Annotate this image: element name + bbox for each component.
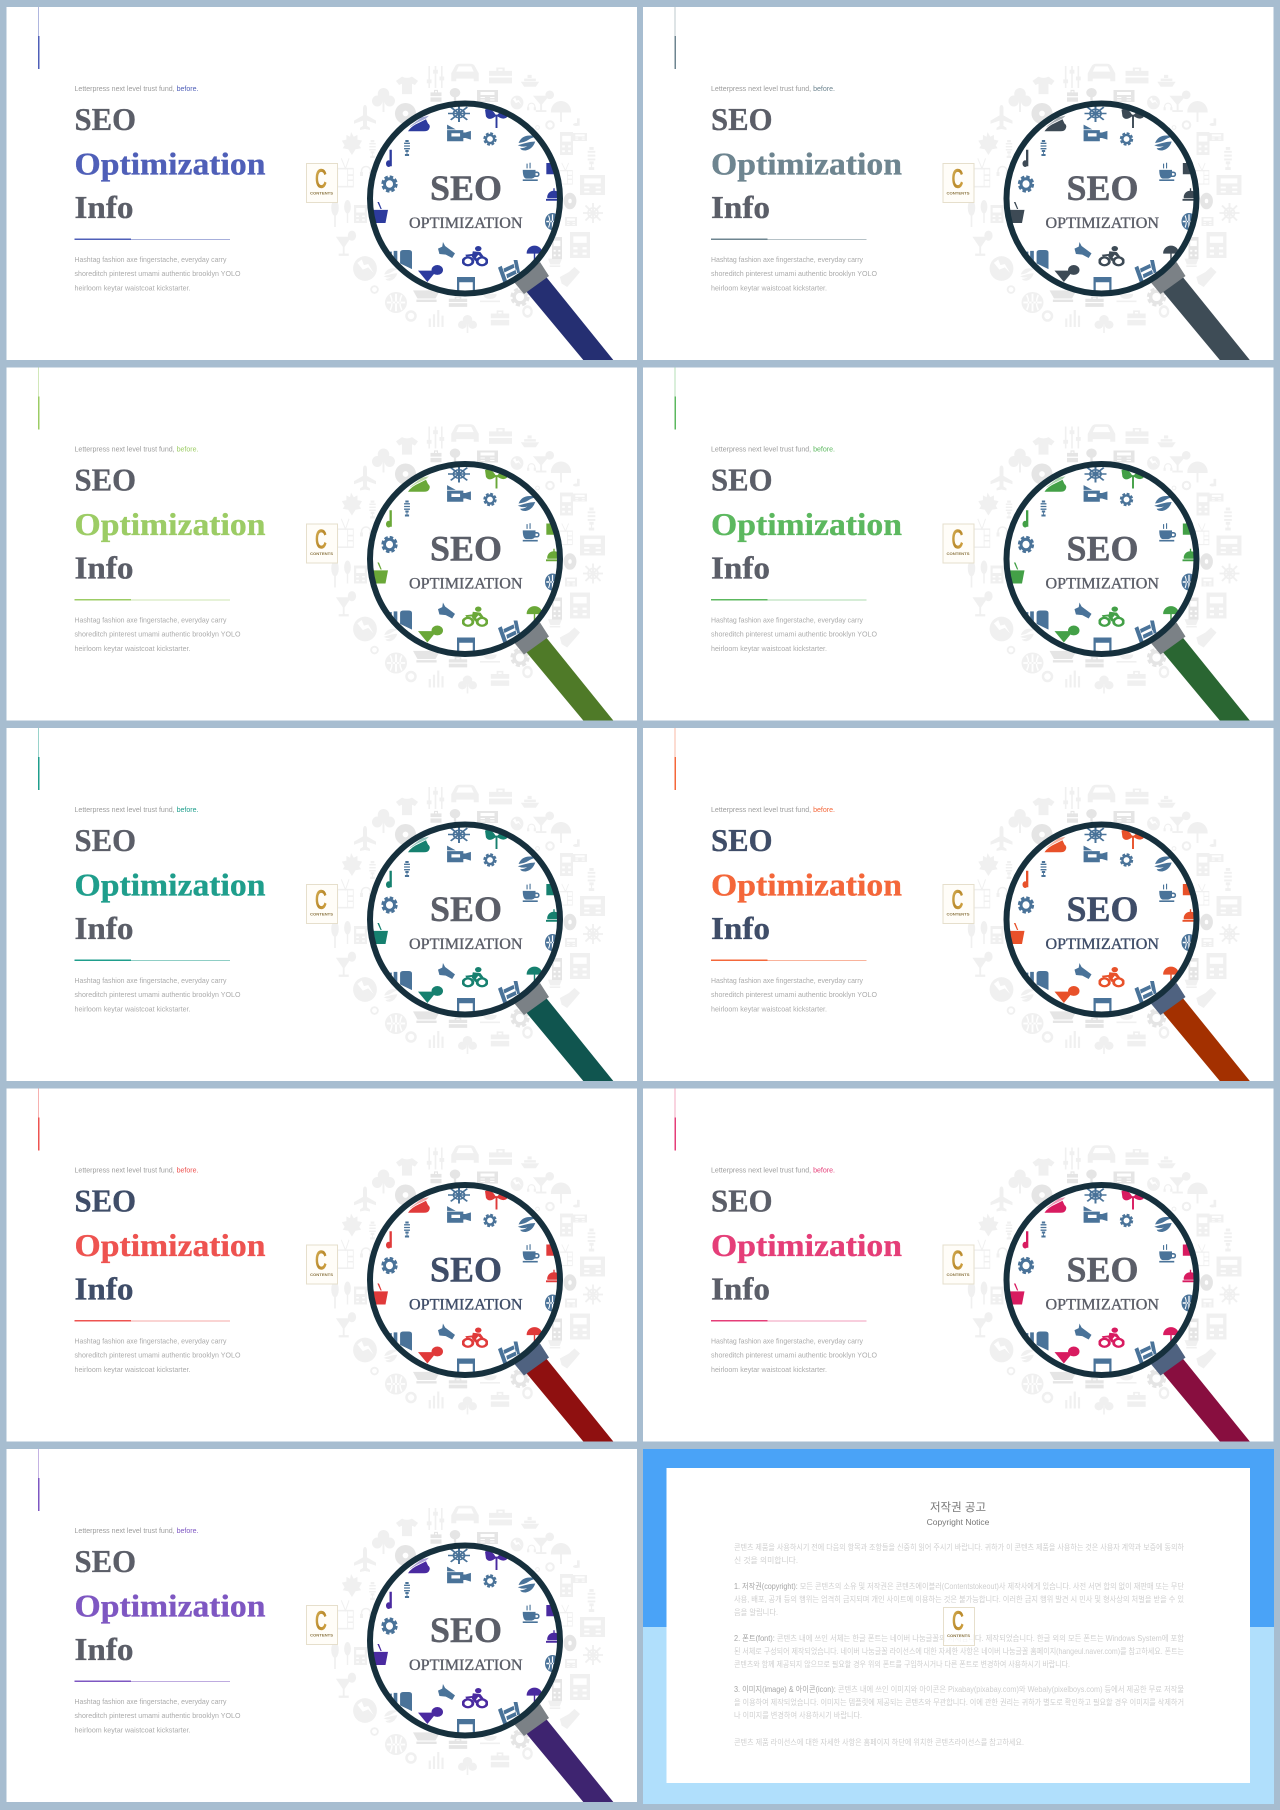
panel: SEO slide orange — [643, 728, 1274, 1081]
body text: Hashtag fashion axe fingerstache, everyday carry — [74, 1336, 227, 1346]
logo: C — [952, 163, 964, 194]
heading — [74, 1543, 266, 1667]
eyebrow text: Letterpress next level trust fund, before. — [74, 84, 199, 93]
eyebrow text: Letterpress next level trust fund, before. — [711, 84, 835, 93]
heading — [74, 462, 266, 586]
rule — [74, 599, 230, 600]
magnifier label — [409, 1610, 523, 1674]
notice body: 음을 알립니다. — [734, 1607, 778, 1617]
logo — [306, 524, 338, 563]
notice body: 사용, 배포, 공개 등의 행위는 엄격히 금지되며 개인 사이트에 이용하는 것은 불가능합니다. 이러한 금지 행위 발견 시 민사 및 형사상의 처벌을 받을 수 있 — [734, 1594, 1184, 1604]
logo: C — [315, 884, 327, 915]
panel: SEO slide green — [643, 368, 1274, 720]
body text: shoreditch pinterest umami authentic brooklyn YOLO — [74, 269, 241, 278]
body text: heirloom keytar waistcoat kickstarter. — [74, 1004, 190, 1014]
notice body: 나 이미지를 변경하여 사용하시기 바랍니다. — [734, 1710, 862, 1720]
body text: Hashtag fashion axe fingerstache, everyday carry — [74, 616, 227, 624]
magnifier label — [409, 889, 523, 953]
magnifier label: OPTIMIZATION — [1046, 936, 1159, 953]
notice body: 된 서체로 구성되어 제작되었습니다. 네이버 나눔글꼴 라이선스에 대한 자세한 사항은 네이버 나눔글꼴 홈페이지(hangeul.naver.com)를 참고하세요. 폰트는 — [734, 1646, 1184, 1656]
logo: CONTENTS — [310, 912, 334, 916]
body text — [711, 616, 877, 653]
body text: shoreditch pinterest umami authentic brooklyn YOLO — [711, 630, 877, 638]
magnifier label — [409, 1250, 523, 1314]
logo: CONTENTS — [310, 1273, 334, 1277]
magnifier label: SEO — [430, 1250, 502, 1290]
logo — [943, 163, 974, 202]
body text: Hashtag fashion axe fingerstache, everyday carry — [74, 255, 227, 264]
notice body: 신 것을 의미합니다. — [734, 1555, 798, 1565]
logo: CONTENTS — [946, 192, 970, 196]
logo: C — [315, 1244, 327, 1276]
heading: Optimization — [711, 146, 902, 182]
logo: CONTENTS — [946, 552, 970, 556]
magnifier — [370, 464, 613, 720]
heading: SEO — [74, 101, 136, 137]
heading: Info — [711, 550, 770, 586]
icon cloud — [331, 1145, 605, 1414]
logo — [306, 1605, 338, 1644]
heading: Optimization — [74, 1588, 266, 1624]
body text: heirloom keytar waistcoat kickstarter. — [711, 284, 827, 292]
rule — [711, 960, 866, 961]
rule — [711, 599, 866, 600]
magnifier — [1006, 1185, 1250, 1442]
notice body: 콘텐츠 제품을 사용하시기 전에 다음의 항목과 조항들을 신중히 읽어 주시기 바랍니다. 귀하가 이 콘텐츠 제품을 사용하는 것은 사용자 계약과 보증에 동의하 — [734, 1542, 1185, 1552]
magnifier label — [409, 528, 523, 592]
heading: Info — [74, 550, 134, 586]
rule — [74, 1320, 230, 1322]
accent line — [38, 1088, 40, 1150]
logo — [944, 1605, 974, 1646]
accent line — [38, 7, 40, 69]
logo: C — [315, 1605, 327, 1636]
heading — [74, 1182, 266, 1306]
notice body — [734, 1542, 1185, 1747]
notice body: 콘텐츠와 함께 제공되지 않으므로 필요할 경우 위의 폰트를 구입하시거나 다른 폰트로 변경하여 사용하시기 바랍니다. — [734, 1659, 1070, 1669]
logo — [943, 524, 974, 563]
panel: SEO slide blue — [6, 7, 637, 360]
magnifier label: SEO — [1066, 1250, 1139, 1290]
body text: heirloom keytar waistcoat kickstarter. — [74, 1726, 190, 1734]
body text — [74, 616, 241, 653]
eyebrow text: Letterpress next level trust fund, before. — [74, 805, 199, 814]
body text: heirloom keytar waistcoat kickstarter. — [711, 1365, 827, 1374]
body text: heirloom keytar waistcoat kickstarter. — [74, 1365, 190, 1374]
eyebrow text: Letterpress next level trust fund, before. — [711, 805, 835, 814]
notice body: 3. 이미지(image) & 아이콘(icon): 콘텐츠 내에 쓰인 이미지와 아이콘은 Pixabay(pixabay.com)와 Webaly(pixelboys.com) 등에서 제공한 무료 저작물 — [734, 1684, 1184, 1694]
panel: copyright notice — [643, 1449, 1274, 1804]
magnifier label — [1046, 889, 1159, 953]
notice body: 을 이용하여 제작되었습니다. 이미지는 템플릿에 제공되는 콘텐츠와 무관합니다. 이에 관한 권리는 귀하가 별도로 확인하고 필요할 경우 이미지를 삭제하거 — [734, 1697, 1184, 1707]
body text — [74, 976, 241, 1014]
magnifier label: OPTIMIZATION — [1046, 576, 1159, 592]
body text: shoreditch pinterest umami authentic brooklyn YOLO — [74, 1350, 241, 1360]
magnifier label: OPTIMIZATION — [409, 936, 523, 953]
heading: SEO — [711, 462, 772, 498]
eyebrow text: Letterpress next level trust fund, before. — [74, 1526, 199, 1535]
magnifier — [370, 104, 613, 360]
heading: Optimization — [74, 506, 266, 542]
heading: SEO — [74, 822, 136, 858]
notice body: 2. 폰트(font): 콘텐츠 내에 쓰인 서체는 한글 폰트는 네이버 나눔글꼴의 서체입니다. 제작되었습니다. 한글 외의 모든 폰트는 Windows System에 포함 — [734, 1633, 1184, 1643]
logo: C — [952, 1605, 964, 1636]
panel: SEO slide purple — [6, 1449, 637, 1802]
body text: shoreditch pinterest umami authentic brooklyn YOLO — [74, 1711, 241, 1720]
notice body: 콘텐츠 제품 라이선스에 대한 자세한 사항은 홈페이지 하단에 위치한 콘텐츠라이선스를 참고하세요. — [734, 1737, 1024, 1747]
panel: SEO slide light green — [6, 368, 637, 720]
magnifier label — [1046, 168, 1159, 232]
eyebrow text: Letterpress next level trust fund, before. — [74, 1166, 199, 1174]
body text: heirloom keytar waistcoat kickstarter. — [74, 644, 190, 653]
heading: Optimization — [711, 1227, 902, 1263]
notice body: 1. 저작권(copyright): 모든 콘텐츠의 소유 및 저작권은 콘텐츠에이블러(Contentstokeout)사 제작사에게 있습니다. 사전 서면 합의 없이 재판매 또는 무단 — [734, 1581, 1184, 1591]
body text: shoreditch pinterest umami authentic brooklyn YOLO — [74, 630, 241, 638]
magnifier label: OPTIMIZATION — [409, 1296, 523, 1314]
logo: CONTENTS — [310, 1634, 334, 1638]
logo — [306, 884, 338, 924]
heading: Info — [711, 1270, 770, 1306]
body text — [711, 1336, 877, 1374]
body text: shoreditch pinterest umami authentic brooklyn YOLO — [74, 990, 241, 999]
heading: Optimization — [74, 866, 266, 902]
panel: SEO slide slate — [643, 7, 1274, 360]
heading: Info — [711, 910, 770, 946]
heading — [711, 101, 902, 225]
rule — [74, 1680, 230, 1682]
body text: shoreditch pinterest umami authentic brooklyn YOLO — [711, 1350, 877, 1360]
magnifier label — [1046, 528, 1159, 592]
accent line — [674, 728, 676, 790]
heading: Info — [74, 1270, 134, 1306]
magnifier label: SEO — [430, 1610, 502, 1650]
notice title — [927, 1501, 990, 1527]
logo: CONTENTS — [947, 1634, 971, 1638]
body text: shoreditch pinterest umami authentic brooklyn YOLO — [711, 269, 877, 278]
heading: SEO — [74, 1182, 136, 1218]
accent line — [38, 728, 40, 790]
body text — [711, 255, 877, 292]
magnifier label: SEO — [1066, 528, 1139, 568]
rule — [74, 238, 230, 240]
heading: Optimization — [711, 506, 902, 542]
logo: C — [315, 524, 327, 554]
heading — [74, 101, 266, 225]
magnifier — [1006, 104, 1250, 360]
logo: C — [315, 163, 327, 194]
logo: CONTENTS — [946, 912, 970, 916]
body text: heirloom keytar waistcoat kickstarter. — [74, 284, 190, 292]
logo — [306, 1244, 338, 1284]
body text — [711, 976, 877, 1014]
magnifier label: OPTIMIZATION — [1046, 1296, 1159, 1314]
heading: SEO — [74, 462, 136, 498]
magnifier label: OPTIMIZATION — [409, 1657, 523, 1674]
heading: Optimization — [711, 866, 902, 902]
magnifier label: SEO — [430, 168, 502, 208]
eyebrow text: Letterpress next level trust fund, before. — [711, 444, 835, 454]
panel: SEO slide pink — [643, 1088, 1274, 1442]
logo — [943, 884, 974, 924]
eyebrow text: Letterpress next level trust fund, before. — [711, 1166, 835, 1174]
heading — [74, 822, 266, 946]
magnifier — [1006, 464, 1250, 720]
heading: Info — [74, 1631, 134, 1667]
magnifier — [1006, 824, 1250, 1081]
notice title: Copyright Notice — [927, 1517, 990, 1527]
heading: SEO — [711, 101, 772, 137]
heading — [711, 462, 902, 586]
magnifier — [370, 1185, 613, 1442]
logo — [943, 1244, 974, 1284]
logo: CONTENTS — [946, 1273, 970, 1277]
heading — [711, 822, 902, 946]
body text: shoreditch pinterest umami authentic brooklyn YOLO — [711, 990, 877, 999]
accent line — [674, 7, 676, 69]
heading: SEO — [711, 1182, 772, 1218]
rule — [711, 1320, 866, 1322]
body text: Hashtag fashion axe fingerstache, everyday carry — [711, 255, 863, 264]
logo: CONTENTS — [310, 552, 334, 556]
body text — [74, 1336, 241, 1374]
body text: Hashtag fashion axe fingerstache, everyday carry — [711, 1336, 863, 1346]
heading: SEO — [711, 822, 772, 858]
panel: SEO slide teal — [6, 728, 637, 1081]
logo: C — [952, 524, 964, 554]
icon cloud — [968, 424, 1242, 694]
magnifier label: OPTIMIZATION — [409, 215, 523, 232]
heading: Info — [711, 189, 770, 225]
logo: C — [952, 884, 964, 915]
accent line — [38, 1449, 40, 1511]
heading: SEO — [74, 1543, 136, 1579]
heading: Info — [74, 189, 134, 225]
accent line — [674, 368, 676, 430]
body text — [74, 1697, 241, 1734]
heading: Optimization — [74, 146, 266, 182]
icon cloud — [331, 64, 605, 333]
logo: C — [952, 1244, 964, 1276]
notice title: 저작권 공고 — [930, 1501, 986, 1514]
body text: Hashtag fashion axe fingerstache, everyday carry — [74, 976, 227, 985]
magnifier label — [409, 168, 523, 232]
icon cloud — [331, 424, 605, 694]
accent line — [38, 368, 40, 430]
body text: heirloom keytar waistcoat kickstarter. — [711, 1004, 827, 1014]
heading — [711, 1182, 902, 1306]
logo — [306, 163, 338, 202]
logo: CONTENTS — [310, 192, 334, 196]
magnifier label: SEO — [430, 528, 502, 568]
heading: Optimization — [74, 1227, 266, 1263]
eyebrow text: Letterpress next level trust fund, before. — [74, 444, 199, 454]
body text — [74, 255, 241, 292]
body text: heirloom keytar waistcoat kickstarter. — [711, 644, 827, 653]
body text: Hashtag fashion axe fingerstache, everyday carry — [74, 1697, 227, 1706]
accent line — [674, 1088, 676, 1150]
icon cloud — [968, 1145, 1242, 1414]
magnifier label: SEO — [430, 889, 502, 929]
panel: SEO slide red — [6, 1088, 637, 1442]
body text: Hashtag fashion axe fingerstache, everyday carry — [711, 976, 863, 985]
icon cloud — [331, 1506, 605, 1775]
icon cloud — [331, 785, 605, 1054]
magnifier label: OPTIMIZATION — [409, 576, 523, 592]
magnifier label: SEO — [1066, 168, 1139, 208]
magnifier label: SEO — [1066, 889, 1139, 929]
icon cloud — [968, 785, 1242, 1054]
rule — [711, 238, 866, 240]
magnifier label: OPTIMIZATION — [1046, 215, 1159, 232]
rule — [74, 960, 230, 961]
icon cloud — [968, 64, 1242, 333]
magnifier — [370, 824, 613, 1081]
magnifier — [370, 1546, 613, 1802]
magnifier label — [1046, 1250, 1159, 1314]
heading: Info — [74, 910, 134, 946]
body text: Hashtag fashion axe fingerstache, everyday carry — [711, 616, 863, 624]
